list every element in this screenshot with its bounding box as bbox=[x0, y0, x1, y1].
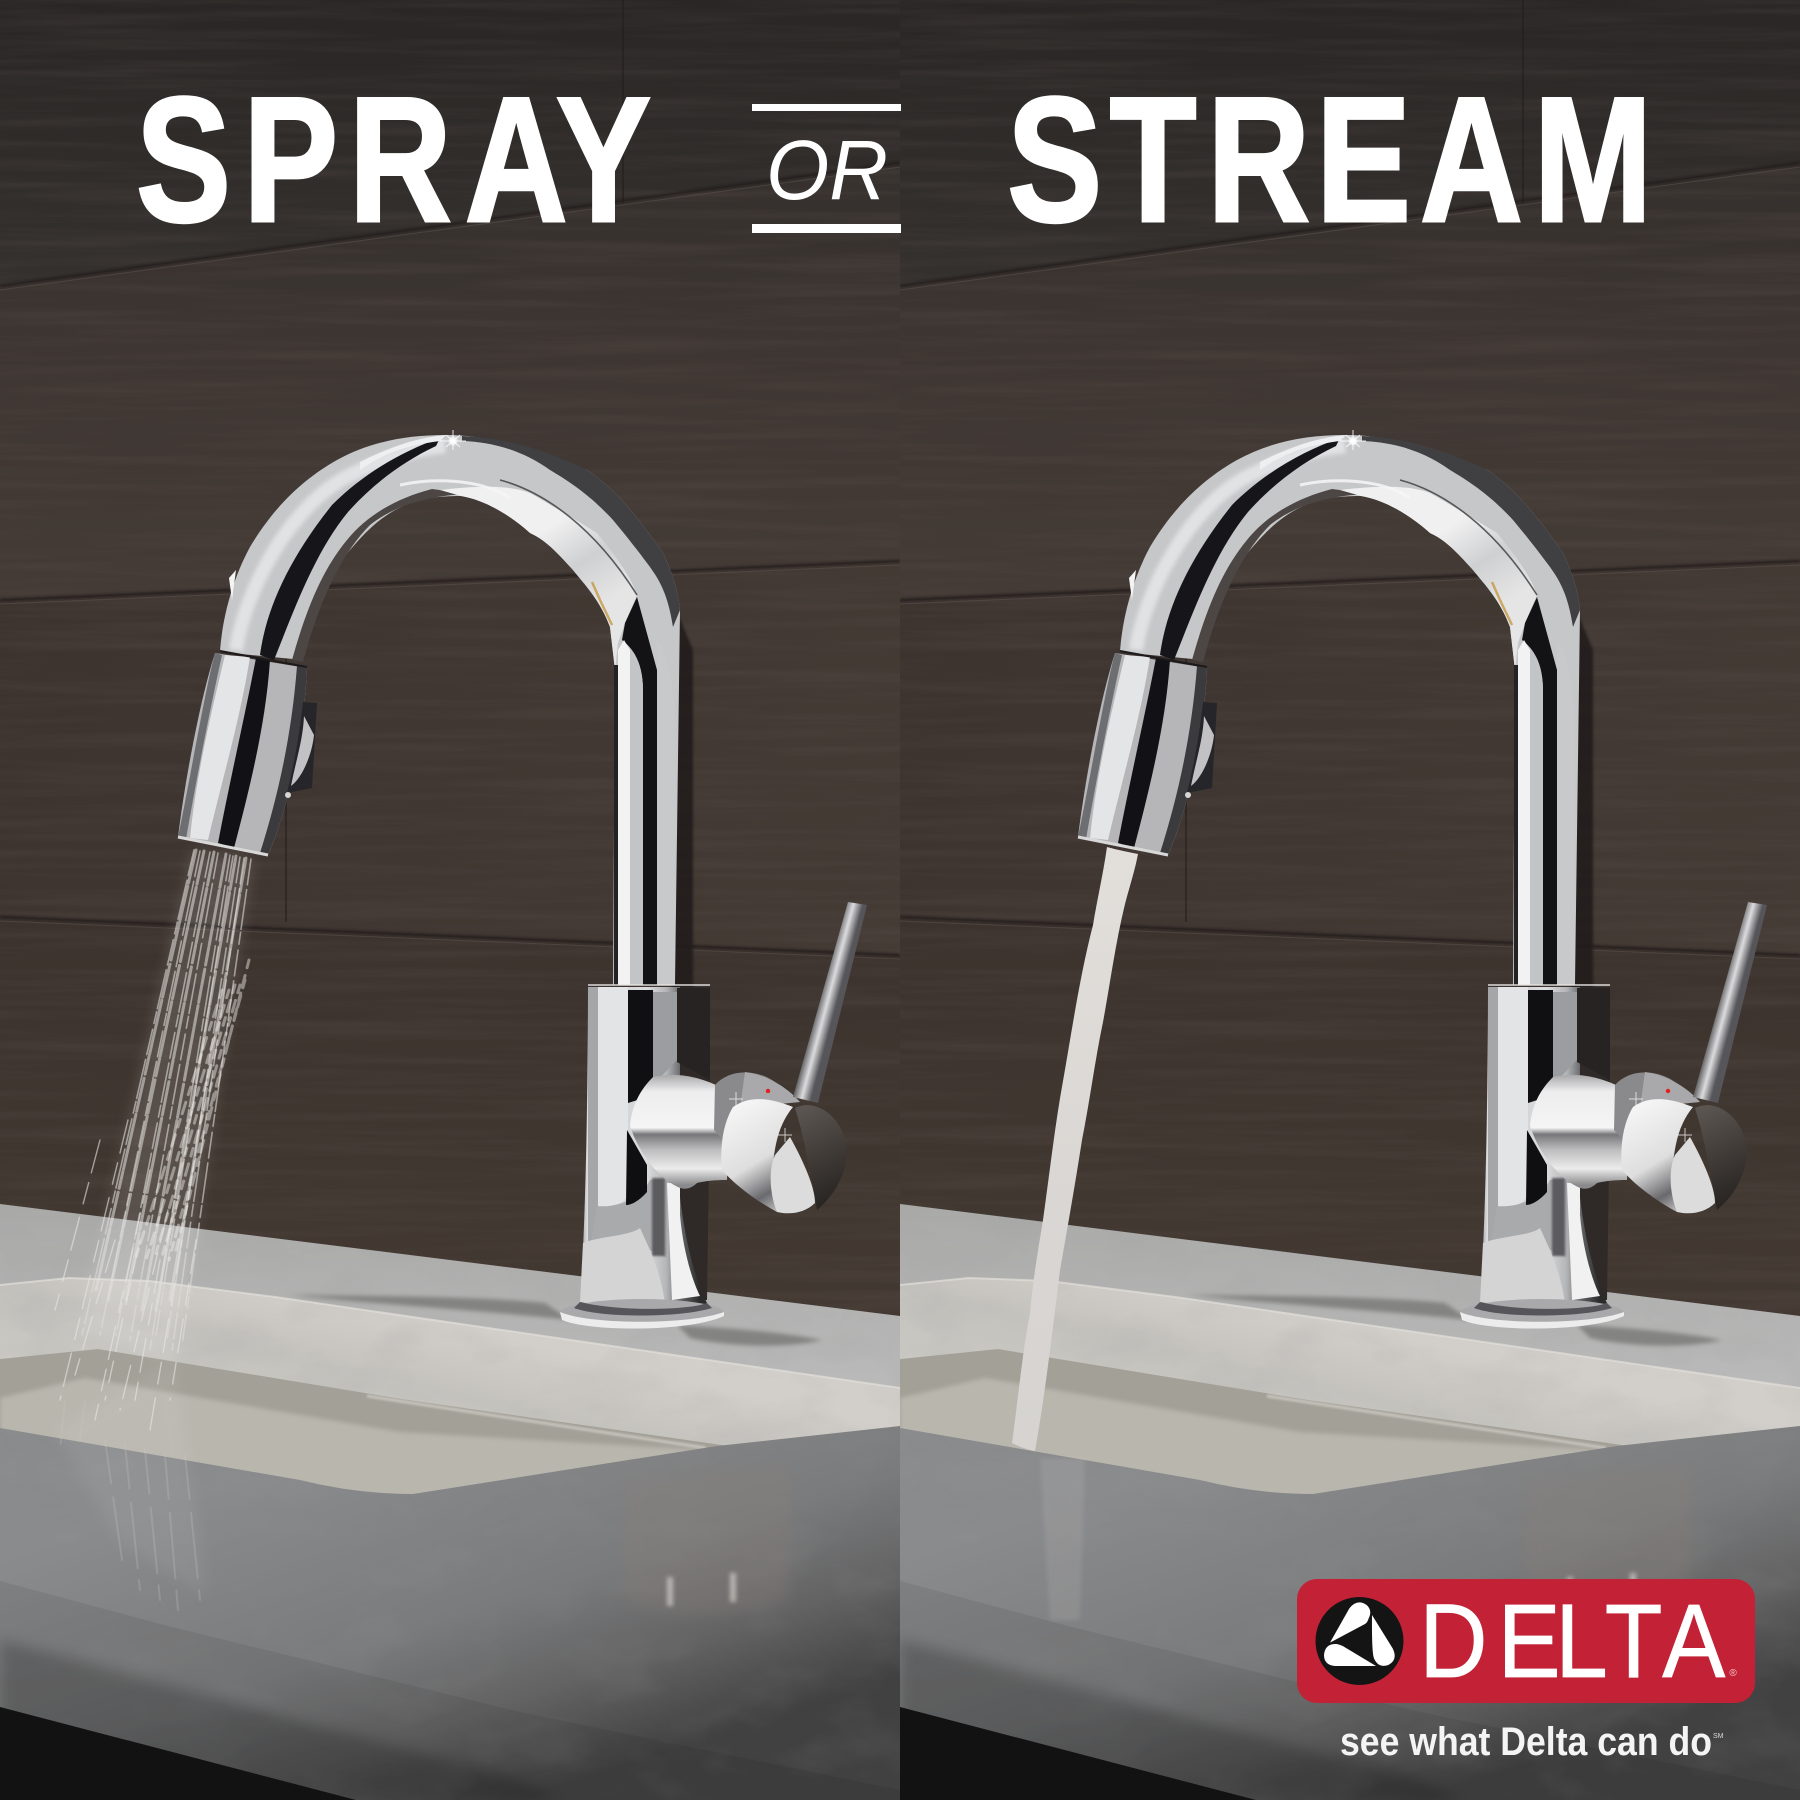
registered mark: ® bbox=[1729, 1668, 1737, 1679]
heading: or with rules: OR bbox=[766, 123, 888, 217]
faucet bbox=[1078, 430, 1767, 1329]
tiled wall background bbox=[0, 0, 900, 1330]
heading: stream: STREAM bbox=[1007, 61, 1652, 260]
wordmark: DELTA bbox=[1419, 1583, 1726, 1700]
black circle emblem bbox=[1316, 1597, 1404, 1685]
stream water bbox=[1012, 847, 1138, 1620]
tagline: see what Delta can do bbox=[1340, 1720, 1712, 1764]
faucet bbox=[178, 430, 867, 1329]
heading: spray: SPRAY bbox=[136, 61, 651, 260]
panel: spray mode bbox=[0, 0, 900, 1800]
tagline: SM bbox=[1713, 1733, 1724, 1740]
marble counter and sink bbox=[0, 1204, 900, 1800]
panel: stream mode bbox=[900, 0, 1800, 1800]
delta logo bbox=[1297, 1579, 1755, 1703]
marble counter and sink bbox=[900, 1204, 1800, 1800]
heading: or with rules bbox=[752, 104, 901, 233]
spray water bbox=[55, 850, 253, 1610]
red logo plate bbox=[1297, 1579, 1755, 1703]
tiled wall background bbox=[900, 0, 1800, 1330]
